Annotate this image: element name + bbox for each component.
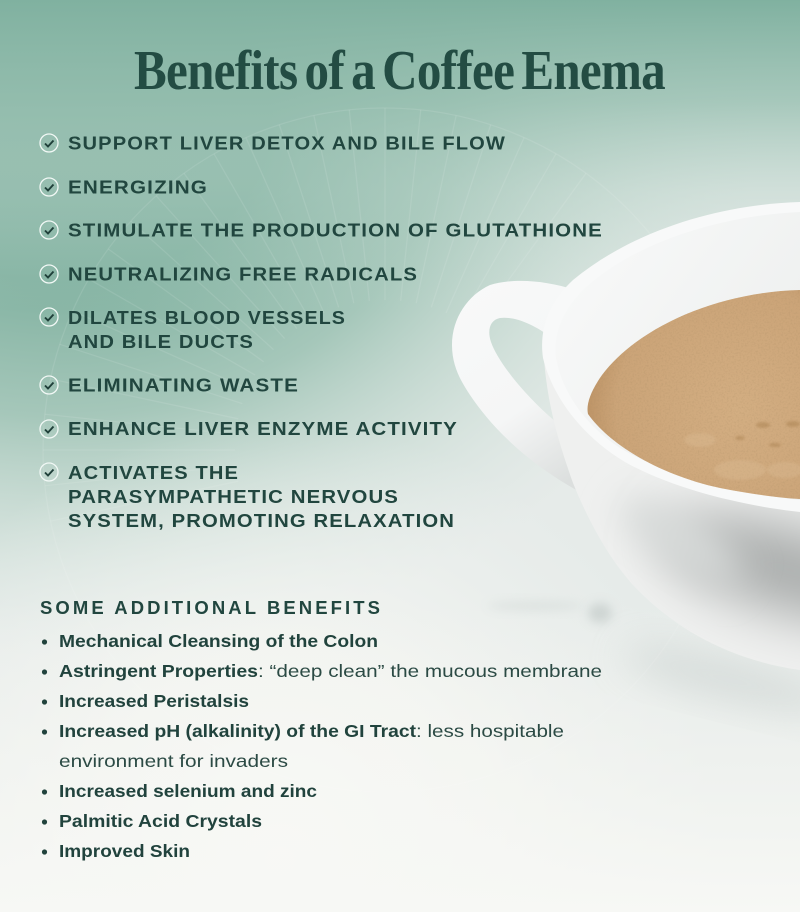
item: parasympathetic: SYSTEM, PROMOTING RELAXATION: [68, 511, 455, 531]
additional benefits list: [42, 631, 602, 861]
coffee cup photo: [452, 202, 800, 670]
item: liver enzyme: ENHANCE LIVER ENZYME ACTIVITY: [68, 419, 458, 439]
bullet: pH: environment for invaders: [59, 751, 288, 771]
bullet: pH: [42, 721, 564, 771]
cup body shading: [608, 483, 800, 646]
item: parasympathetic: [40, 463, 455, 531]
bullet: mechanical cleansing: Mechanical Cleansing of the Colon: [59, 631, 378, 651]
cup body: [543, 340, 800, 670]
item: liver detox: SUPPORT LIVER DETOX AND BILE FLOW: [68, 134, 506, 154]
bullet: peristalsis: Increased Peristalsis: [59, 691, 249, 711]
item: glutathione: STIMULATE THE PRODUCTION OF GLUTATHIONE: [68, 220, 603, 240]
bullet: selenium: Increased selenium and zinc: [59, 781, 317, 801]
bullet: astringent: Astringent Properties: [59, 661, 258, 681]
item: energizing: ENERGIZING: [68, 178, 208, 198]
bullet: pH: : less hospitable: [416, 721, 564, 741]
item: dilates: DILATES BLOOD VESSELS: [68, 308, 346, 328]
item: parasympathetic: ACTIVATES THE: [68, 463, 239, 483]
item: dilates: AND BILE DUCTS: [68, 332, 254, 352]
cup rim and interior: [542, 202, 800, 512]
main benefits checklist: [40, 134, 603, 531]
radial line pattern: [43, 108, 727, 792]
title: Benefits of a Coffee Enema: [134, 40, 666, 102]
bullet: skin: Improved Skin: [59, 841, 190, 861]
additional benefits heading: SOME ADDITIONAL BENEFITS: [40, 598, 383, 618]
bullet: astringent: : “deep clean” the mucous membrane: [258, 661, 602, 681]
item: dilates: [40, 308, 346, 352]
coffee surface: [580, 285, 800, 505]
bullet: pH: Increased pH (alkalinity) of the GI Tract: [59, 721, 416, 741]
item: eliminating waste: ELIMINATING WASTE: [68, 376, 299, 396]
bullet: palmitic: Palmitic Acid Crystals: [59, 811, 262, 831]
item: parasympathetic: PARASYMPATHETIC NERVOUS: [68, 487, 399, 507]
cup handle: [452, 281, 600, 492]
item: free radicals: NEUTRALIZING FREE RADICALS: [68, 264, 418, 284]
bullet: astringent: [42, 661, 602, 681]
